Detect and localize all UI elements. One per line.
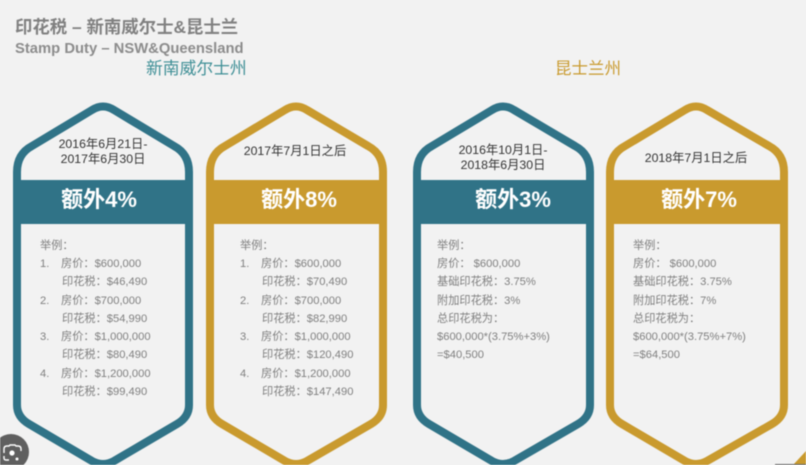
heading: New South Wales: 新南威尔士州	[146, 59, 247, 78]
rate band	[210, 180, 383, 224]
examples: 印花税：$54,990	[62, 311, 147, 325]
date: 2017年7月1日之后	[244, 144, 346, 158]
date: 2017年6月30日	[61, 152, 145, 166]
examples: 4.	[40, 368, 49, 380]
example: 基础印花税：3.75%	[633, 274, 732, 288]
examples: 2.	[240, 295, 249, 307]
examples: 印花税：$46,490	[62, 274, 147, 288]
panel: NSW 2017 onward	[210, 106, 383, 464]
rate band	[417, 180, 590, 224]
examples: 印花税：$120,490	[262, 347, 353, 361]
hexagon frame	[610, 106, 784, 464]
examples: 房价：$1,000,000	[61, 330, 151, 343]
example: =$40,500	[437, 349, 484, 361]
hexagon frame	[210, 106, 383, 464]
example: 总印花税为：	[437, 311, 504, 325]
date: 2018年6月30日	[461, 158, 545, 172]
date: 2018年7月1日之后	[645, 151, 747, 165]
example: 基础印花税：3.75%	[437, 274, 536, 288]
example: 举例：	[437, 238, 471, 252]
hexagon frame	[417, 106, 590, 464]
examples: 房价：$1,200,000	[61, 367, 151, 380]
examples: 印花税：$147,490	[262, 384, 353, 398]
corner fragment: gold edge of next shape	[793, 451, 806, 465]
rate: 额外7%	[661, 187, 737, 212]
example: =$64,500	[633, 349, 680, 361]
date: 2016年6月21日-	[59, 137, 147, 151]
example: 附加印花税：3%	[437, 293, 520, 307]
examples: 房价：$1,200,000	[261, 367, 351, 380]
examples: 房价：$1,000,000	[261, 330, 351, 343]
examples: 房价：$700,000	[261, 294, 341, 307]
example: 房价： $600,000	[437, 257, 520, 270]
rate: 额外4%	[61, 187, 137, 212]
examples: 印花税：$80,490	[62, 347, 147, 361]
heading: Queensland: 昆士兰州	[555, 59, 621, 78]
examples: 印花税：$99,490	[62, 384, 147, 398]
hexagon frame	[17, 106, 189, 464]
example: 总印花税为：	[633, 311, 700, 325]
rate: 额外3%	[475, 187, 551, 212]
title: English: Stamp Duty – NSW&Queensland	[15, 41, 244, 57]
examples: 4.	[240, 368, 249, 380]
panel: NSW 2016-2017	[17, 106, 189, 464]
rate: 额外8%	[261, 187, 337, 212]
example: 附加印花税：7%	[633, 293, 716, 307]
rate band	[610, 180, 784, 224]
examples: 举例：	[240, 238, 274, 252]
examples: 房价：$700,000	[61, 294, 141, 307]
panel: Queensland 2016-2018	[417, 106, 590, 464]
examples: 3.	[240, 331, 249, 343]
examples: 1.	[40, 258, 49, 270]
examples: 房价：$600,000	[261, 257, 341, 270]
date: 2016年10月1日-	[459, 143, 547, 157]
example: $600,000*(3.75%+7%)	[633, 331, 746, 343]
example: 举例：	[633, 238, 667, 252]
examples: 2.	[40, 295, 49, 307]
examples: 印花税：$70,490	[262, 274, 347, 288]
examples: 印花税：$82,990	[262, 311, 347, 325]
panel: Queensland 2018 onward	[610, 106, 784, 464]
corner fragment: grey strip	[775, 464, 806, 465]
rate band	[17, 180, 189, 224]
example: $600,000*(3.75%+3%)	[437, 331, 550, 343]
example: 房价： $600,000	[633, 257, 716, 270]
title: Chinese: 印花税 – 新南威尔士&昆士兰	[15, 17, 238, 37]
examples: 举例：	[40, 238, 74, 252]
examples: 房价：$600,000	[61, 257, 141, 270]
icon: lens button	[0, 434, 29, 465]
examples: 3.	[40, 331, 49, 343]
examples: 1.	[240, 258, 249, 270]
